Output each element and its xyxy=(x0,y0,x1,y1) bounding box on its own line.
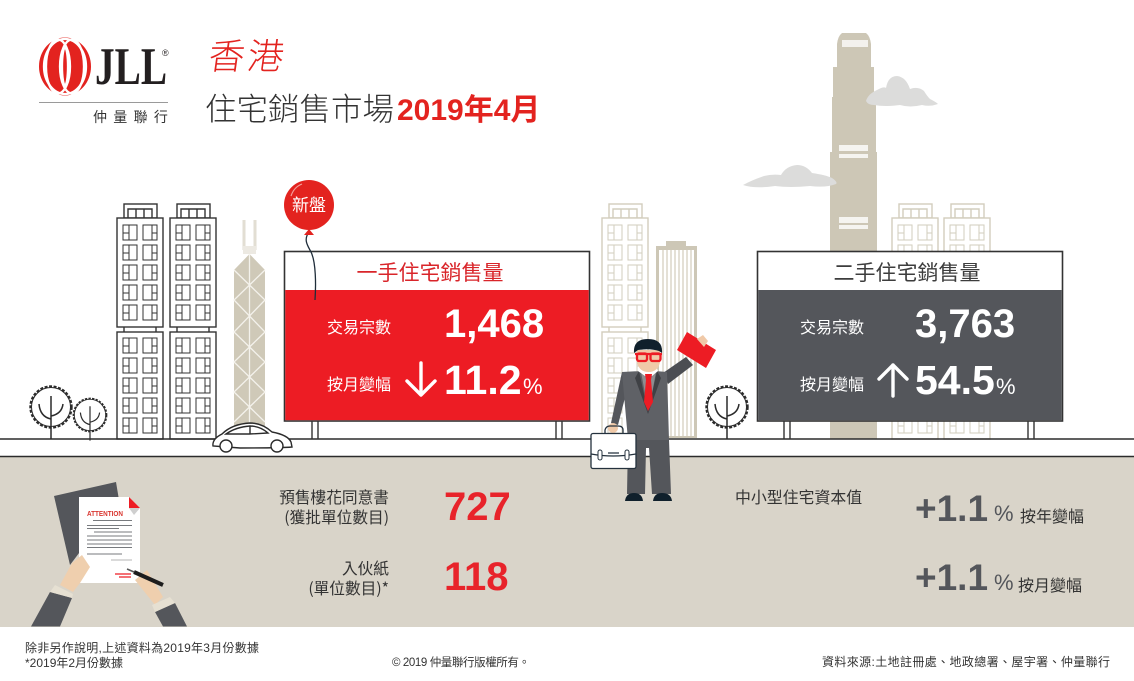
pen xyxy=(127,569,134,572)
stat: presale consent: 727 xyxy=(444,485,511,529)
ground band xyxy=(0,457,1134,627)
lowered hand xyxy=(608,423,618,433)
change value: % xyxy=(996,374,1016,399)
attention text: ATTENTION xyxy=(87,511,123,518)
glasses xyxy=(635,354,662,361)
tie xyxy=(644,374,653,411)
illustration: signing document xyxy=(31,482,187,626)
source: 資料來源:土地註冊處、地政總署、屋宇署、仲量聯行 xyxy=(822,654,1110,669)
billboard: second-hand sales xyxy=(758,252,1062,439)
shoes xyxy=(625,493,672,501)
change value: 11.2 xyxy=(444,357,522,403)
change label: 按月變幅 xyxy=(327,371,391,395)
stat: capital value yearly: % xyxy=(994,501,1014,526)
stat: capital value monthly: +1.1 xyxy=(915,557,988,598)
stat: occupation permit: 118 xyxy=(444,555,509,599)
red folder xyxy=(677,332,716,368)
billboard heading: 二手住宅銷售量 xyxy=(834,257,980,287)
billboard heading: 一手住宅銷售量 xyxy=(356,257,504,287)
transactions value: 1,468 xyxy=(444,302,544,346)
arrow down xyxy=(407,363,435,395)
stat: capital value yearly xyxy=(735,485,1084,529)
folder xyxy=(54,482,119,565)
head xyxy=(637,350,660,372)
paper xyxy=(79,497,140,583)
document lines xyxy=(87,520,132,554)
left hand xyxy=(60,555,90,592)
footnote xyxy=(25,640,259,670)
balloon xyxy=(284,180,334,300)
balloon label: 新盤 xyxy=(292,191,326,216)
transactions label: 交易宗數 xyxy=(327,314,391,338)
legs xyxy=(627,440,671,494)
stat: occupation permit xyxy=(308,555,509,599)
shirt xyxy=(638,366,658,376)
businessman xyxy=(591,332,716,501)
logo: JLL: ® xyxy=(162,48,169,58)
vest xyxy=(641,372,656,404)
stat: occupation permit: 入伙紙 xyxy=(342,556,389,579)
change value: % xyxy=(523,374,543,399)
logo: JLL: 仲量聯行 xyxy=(93,107,174,127)
footnote: 除非另作說明,上述資料為2019年3月份數據 xyxy=(25,640,259,655)
change value: 54.5 xyxy=(915,357,995,403)
raised hand xyxy=(697,335,708,347)
building group: left towers xyxy=(117,204,216,439)
building: striped tower xyxy=(656,241,697,438)
cloud: upper xyxy=(866,76,938,106)
cloud: lower xyxy=(743,165,836,187)
ground lines xyxy=(0,439,1134,456)
transactions value: 3,763 xyxy=(915,302,1015,346)
stat: capital value yearly: 按年變幅 xyxy=(1020,503,1084,527)
lowered arm xyxy=(611,372,630,425)
building: beige centre xyxy=(602,204,648,439)
logo: JLL: JLL xyxy=(95,38,167,96)
heading: Hong Kong handwritten: 香港 xyxy=(205,28,291,80)
tower: International Finance Centre xyxy=(830,33,877,439)
title: 住宅銷售市場 xyxy=(205,84,394,130)
billboard: first-hand sales xyxy=(284,252,590,439)
stat: presale consent xyxy=(279,485,511,529)
car xyxy=(213,423,292,452)
stat: presale consent: 預售樓花同意書 xyxy=(279,485,389,508)
stat: presale consent: (獲批單位數目) xyxy=(284,505,389,528)
stat: capital value yearly: 中小型住宅資本值 xyxy=(735,485,862,508)
raised arm xyxy=(663,357,693,384)
left sleeve xyxy=(31,592,72,626)
stat: capital value yearly: +1.1 xyxy=(915,488,988,529)
stat: occupation permit: (單位數目)* xyxy=(308,576,389,599)
stat: capital value monthly xyxy=(915,557,1082,598)
title: 2019年4月 xyxy=(397,94,540,127)
copyright: © 2019 仲量聯行版權所有。 xyxy=(392,655,530,669)
stat: capital value monthly: 按月變幅 xyxy=(1018,572,1082,596)
stat: capital value monthly: % xyxy=(994,570,1014,595)
footnote: *2019年2月份數據 xyxy=(25,656,123,670)
right sleeve xyxy=(155,603,187,626)
briefcase xyxy=(591,426,636,468)
building group: beige right xyxy=(892,204,990,439)
change label: 按月變幅 xyxy=(800,371,864,395)
transactions label: 交易宗數 xyxy=(800,314,864,338)
right hand xyxy=(135,570,163,605)
jacket xyxy=(622,371,669,440)
building: Bank of China Tower xyxy=(234,220,265,438)
arrow up xyxy=(879,365,907,396)
logo: JLL xyxy=(39,38,174,127)
trees xyxy=(30,386,748,441)
